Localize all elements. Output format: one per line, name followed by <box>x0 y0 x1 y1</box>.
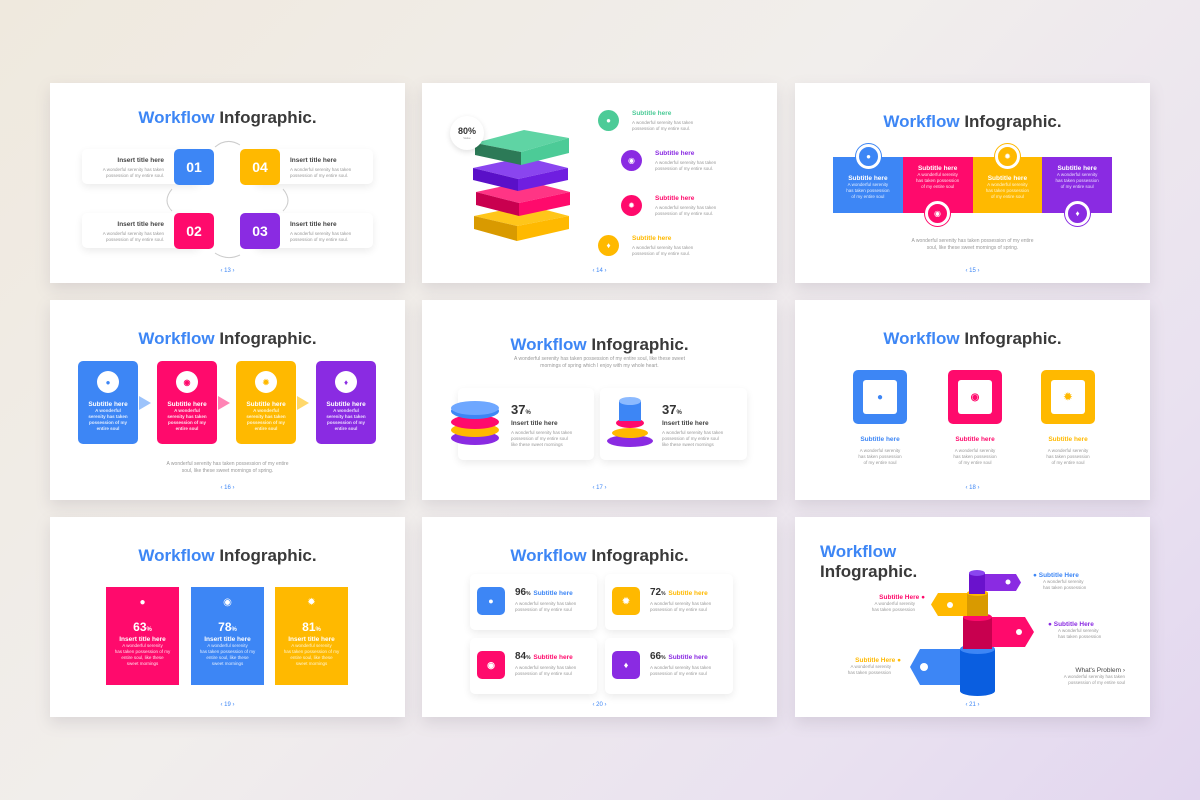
process cards: entire soul <box>97 426 119 431</box>
bar segments: Subtitle here <box>848 175 888 182</box>
bar segments: A wonderful serenity <box>1057 172 1097 177</box>
card right: 37% <box>662 402 682 417</box>
item pink: ✹ <box>628 201 635 210</box>
item green: A wonderful serenity has taken <box>632 120 693 125</box>
item purple: Subtitle here <box>655 150 694 157</box>
title: Workflow Infographic. <box>883 112 1062 131</box>
slide 20: 2x2 stat cards <box>422 517 777 717</box>
circle icons: ● <box>866 152 871 161</box>
box 01: 01 <box>186 159 202 175</box>
item pink: possession of my entire soul. <box>655 211 713 216</box>
label left pink <box>872 594 925 612</box>
item yellow: Subtitle here <box>632 235 671 242</box>
card 78%: A wonderful serenity <box>207 643 248 648</box>
process cards: Subtitle here <box>167 401 207 408</box>
item pink: A wonderful serenity has taken <box>655 205 716 210</box>
subtitle <box>514 356 685 369</box>
label left yellow <box>848 657 901 675</box>
page number: ‹ 19 › <box>220 702 234 708</box>
title: Workflow Infographic. <box>138 108 317 127</box>
slide 16: four process cards <box>50 300 405 500</box>
card left: like these sweet mornings <box>511 442 563 447</box>
slide 15: horizontal bar: ✹ <box>1004 152 1011 161</box>
card 78% <box>191 587 264 685</box>
item purple: possession of my entire soul. <box>655 166 713 171</box>
card left: Insert title here <box>511 420 558 427</box>
caption <box>911 238 1034 251</box>
bar segments: of my entire soul <box>921 184 954 189</box>
item yellow: A wonderful serenity has taken <box>632 245 693 250</box>
bar segments: Subtitle here <box>1057 165 1097 172</box>
slide 13: workflow with numbered squares <box>50 83 405 283</box>
card 78%: has taken possession of my <box>200 649 255 654</box>
card: 03: possession of my entire soul. <box>290 237 348 242</box>
bar segments: has taken possession <box>1055 178 1099 183</box>
process cards: possession of my <box>247 420 285 425</box>
item yellow: of my entire soul <box>1051 460 1084 465</box>
label left yellow: A wonderful serenity <box>850 664 891 669</box>
title: Workflow Infographic. <box>510 335 689 354</box>
process cards: A wonderful <box>253 408 279 413</box>
label top right <box>1033 572 1086 590</box>
bar segments: of my entire soul <box>1061 184 1094 189</box>
title: Workflow Infographic. <box>138 329 317 348</box>
card 66%: possession of my entire soul <box>650 671 707 676</box>
cycle arrows <box>166 140 288 258</box>
item yellow: possession of my entire soul. <box>632 251 690 256</box>
card right: A wonderful serenity has taken <box>662 430 723 435</box>
item blue: ● <box>877 392 883 402</box>
card right: like these sweet mornings <box>662 442 714 447</box>
box 02 <box>174 213 214 249</box>
bar segments: of my entire soul <box>991 194 1024 199</box>
process cards: entire soul <box>176 426 198 431</box>
page number: ‹ 17 › <box>592 485 606 491</box>
title: Workflow Infographic. <box>510 546 689 565</box>
item pink: Subtitle here <box>955 436 995 443</box>
icons <box>920 663 928 671</box>
card 63%: Insert title here <box>119 636 166 643</box>
card 84%: ◉ <box>487 660 495 670</box>
box 01 <box>174 149 214 185</box>
bar segments <box>833 157 1112 213</box>
item blue: of my entire soul <box>863 460 896 465</box>
slide 19: three percentage cards <box>50 517 405 717</box>
card 96%: possession of my entire soul <box>515 607 572 612</box>
signpost graphic <box>910 570 1034 696</box>
card right: possession of my entire soul <box>662 436 719 441</box>
what's problem: possession of my entire soul <box>1068 680 1125 685</box>
card left <box>458 388 594 460</box>
card 66%: ♦ <box>624 660 628 670</box>
card 66%: A wonderful serenity has taken <box>650 665 711 670</box>
process cards: ◉ <box>184 378 190 386</box>
bar segments: Subtitle here <box>988 175 1027 182</box>
card 84%: 84% Subtitle here <box>515 651 573 662</box>
bar segments: Subtitle here <box>918 165 957 172</box>
item green: ● <box>606 116 611 125</box>
what's problem: What's Problem › <box>1075 667 1125 674</box>
card: 02: A wonderful serenity has taken <box>103 231 164 236</box>
title: Workflow Infographic. <box>883 329 1062 348</box>
label right purple: A wonderful serenity <box>1058 628 1099 633</box>
label top right: has taken possession <box>1043 585 1086 590</box>
card left: possession of my entire soul <box>511 436 568 441</box>
page number: ‹ 14 › <box>592 268 606 274</box>
process cards: serenity has taken <box>326 414 366 419</box>
caption <box>166 461 288 474</box>
card: 03 <box>255 213 373 248</box>
item purple: A wonderful serenity has taken <box>655 160 716 165</box>
item blue: has taken possession <box>858 454 902 459</box>
process cards: possession of my <box>327 420 365 425</box>
item pink: has taken possession <box>953 454 997 459</box>
card 81%: ✹ <box>307 597 316 608</box>
process cards: ● <box>106 378 110 386</box>
card 63%: ● <box>139 597 146 608</box>
card: 02: Insert title here <box>117 221 164 228</box>
slide 15: horizontal bar: ◉ <box>934 209 941 218</box>
item green: Subtitle here <box>632 110 671 117</box>
process cards: serenity has taken <box>246 414 286 419</box>
label left yellow: has taken possession <box>848 670 891 675</box>
title: Workflow <box>820 542 896 561</box>
card 81%: has taken possession of my <box>284 649 339 654</box>
stacked rings right <box>607 397 653 447</box>
what's problem: A wonderful serenity has taken <box>1064 674 1125 679</box>
card 81%: sweet mornings <box>296 661 327 666</box>
card 96%: ● <box>488 596 494 606</box>
item blue <box>853 370 907 465</box>
yellow <box>931 593 970 616</box>
discs left <box>451 401 499 445</box>
card 81%: Insert title here <box>288 636 335 643</box>
3d layers <box>473 130 570 241</box>
bar segments: has taken possession <box>986 188 1029 193</box>
slide 14: stacked layers <box>422 83 777 283</box>
card 63%: A wonderful serenity <box>122 643 163 648</box>
card: 04: Insert title here <box>290 157 337 164</box>
page number: ‹ 16 › <box>220 485 234 491</box>
blue <box>910 649 961 685</box>
slide 15: horizontal bar: ♦ <box>1075 209 1080 218</box>
process cards: Subtitle here <box>246 401 286 408</box>
card 96%: 96% Subtitle here <box>515 587 573 598</box>
card 66%: 66% Subtitle here <box>650 651 708 662</box>
label right purple: has taken possession <box>1058 634 1101 639</box>
slide 18: three icon squares <box>795 300 1150 500</box>
label left pink: has taken possession <box>872 607 915 612</box>
process cards: A wonderful <box>95 408 121 413</box>
process cards: Subtitle here <box>326 401 366 408</box>
card 78%: 78% <box>218 620 237 634</box>
card 78%: sweet mornings <box>212 661 243 666</box>
card: 01: Insert title here <box>117 157 164 164</box>
item yellow: ✹ <box>1064 392 1072 402</box>
card 63% <box>106 587 179 685</box>
item pink: of my entire soul <box>958 460 992 465</box>
process cards: entire soul <box>255 426 277 431</box>
item pink: ◉ <box>971 392 979 402</box>
caption: soul, like these sweet mornings of spring. <box>182 468 273 474</box>
title: Workflow Infographic. <box>138 546 317 565</box>
card 78%: entire soul, like these <box>206 655 249 660</box>
card 84%: possession of my entire soul <box>515 671 572 676</box>
item green: possession of my entire soul. <box>632 126 690 131</box>
card 72%: 72% Subtitle here <box>650 587 708 598</box>
slide 21: signpost cylinder <box>795 517 1150 717</box>
80% callout: Value <box>463 136 471 140</box>
card 72%: A wonderful serenity has taken <box>650 601 711 606</box>
card 84% <box>470 638 597 694</box>
item yellow: Subtitle here <box>1048 436 1088 443</box>
card left: A wonderful serenity has taken <box>511 430 572 435</box>
page number: ‹ 21 › <box>965 702 980 708</box>
card 66% <box>605 638 733 694</box>
item yellow: has taken possession <box>1046 454 1090 459</box>
item pink <box>948 370 1002 465</box>
card: 02 <box>82 213 200 248</box>
card 63%: sweet mornings <box>127 661 158 666</box>
label top right: ● Subtitle Here <box>1033 572 1079 579</box>
process cards: entire soul <box>335 426 357 431</box>
box 02: 02 <box>186 223 202 239</box>
purple <box>981 574 1021 591</box>
bar segments: has taken possession <box>846 188 890 193</box>
card: 03: A wonderful serenity has taken <box>290 231 351 236</box>
process cards: serenity has taken <box>167 414 207 419</box>
process cards: Subtitle here <box>88 401 128 408</box>
card 96%: A wonderful serenity has taken <box>515 601 576 606</box>
card 72%: possession of my entire soul <box>650 607 707 612</box>
item blue: A wonderful serenity <box>860 448 900 453</box>
process cards <box>78 361 376 444</box>
card: 04 <box>255 149 373 184</box>
card right: Insert title here <box>662 420 709 427</box>
box 03: 03 <box>252 223 268 239</box>
box 04 <box>240 149 280 185</box>
item pink: Subtitle here <box>655 195 694 202</box>
process cards: possession of my <box>89 420 127 425</box>
bar segments: A wonderful serenity <box>917 172 958 177</box>
card: 04: A wonderful serenity has taken <box>290 167 351 172</box>
item yellow: A wonderful serenity <box>1048 448 1088 453</box>
label top right: A wonderful serenity <box>1043 579 1084 584</box>
caption: A wonderful serenity has taken possession of my entire <box>911 238 1034 244</box>
card 84%: A wonderful serenity has taken <box>515 665 576 670</box>
card: 04: possession of my entire soul. <box>290 173 348 178</box>
title <box>820 542 917 581</box>
item yellow: ♦ <box>606 241 611 250</box>
process cards: serenity has taken <box>88 414 128 419</box>
card 81%: A wonderful serenity <box>291 643 332 648</box>
card 78%: ◉ <box>223 597 232 608</box>
item purple <box>621 150 716 171</box>
label left pink: A wonderful serenity <box>874 601 915 606</box>
card 81%: entire soul, like these <box>290 655 333 660</box>
circle icons <box>856 144 881 169</box>
card: 02: possession of my entire soul. <box>106 237 164 242</box>
process cards: ✹ <box>263 378 269 386</box>
label left yellow: Subtitle Here ● <box>855 657 901 664</box>
card 96% <box>470 574 597 630</box>
caption: soul, like these sweet mornings of spring. <box>927 245 1018 251</box>
bar segments: A wonderful serenity <box>848 182 888 187</box>
card 63%: entire soul, like these <box>121 655 164 660</box>
card 63%: 63% <box>133 620 152 634</box>
item green <box>598 110 693 131</box>
slide 15: horizontal bar <box>795 83 1150 283</box>
bar segments: A wonderful serenity <box>987 182 1028 187</box>
page number: ‹ 13 › <box>220 268 234 274</box>
card right <box>600 388 747 460</box>
label right purple: ● Subtitle Here <box>1048 621 1094 628</box>
card 72% <box>605 574 733 630</box>
process cards: possession of my <box>168 420 206 425</box>
page number: ‹ 20 › <box>592 702 606 708</box>
label right purple <box>1048 621 1101 639</box>
card: 03: Insert title here <box>290 221 337 228</box>
subtitle: mornings of spring which I enjoy with my whole heart. <box>540 363 659 369</box>
page number: ‹ 15 › <box>965 268 980 274</box>
title: Infographic. <box>820 562 917 581</box>
slide 17: discs with percentages <box>422 300 777 500</box>
bar segments: has taken possession <box>916 178 959 183</box>
card 63%: has taken possession of my <box>115 649 170 654</box>
caption: A wonderful serenity has taken possession of my entire <box>166 461 288 467</box>
bar segments: of my entire soul <box>851 194 884 199</box>
card 81%: 81% <box>302 620 321 634</box>
card 72%: ✹ <box>622 596 630 606</box>
item purple: ◉ <box>628 156 635 165</box>
page number: ‹ 18 › <box>965 485 980 491</box>
subtitle: A wonderful serenity has taken possession of my entire soul, like these sweet <box>514 356 685 362</box>
item yellow <box>598 235 693 256</box>
card 78%: Insert title here <box>204 636 251 643</box>
80% callout: 80% <box>458 126 476 136</box>
80% callout <box>450 116 484 150</box>
card 81% <box>275 587 348 685</box>
what's problem <box>1064 667 1125 685</box>
card: 01: possession of my entire soul. <box>106 173 164 178</box>
process cards: A wonderful <box>174 408 200 413</box>
item pink: A wonderful serenity <box>955 448 995 453</box>
box 04: 04 <box>252 159 268 175</box>
process cards: ♦ <box>344 378 348 386</box>
pink <box>985 617 1034 647</box>
card: 01: A wonderful serenity has taken <box>103 167 164 172</box>
item blue: Subtitle here <box>860 436 900 443</box>
card: 01 <box>82 149 200 184</box>
box 03 <box>240 213 280 249</box>
card left: 37% <box>511 402 531 417</box>
item pink <box>621 195 716 216</box>
label left pink: Subtitle Here ● <box>879 594 925 601</box>
process cards: A wonderful <box>333 408 359 413</box>
item yellow <box>1041 370 1095 465</box>
